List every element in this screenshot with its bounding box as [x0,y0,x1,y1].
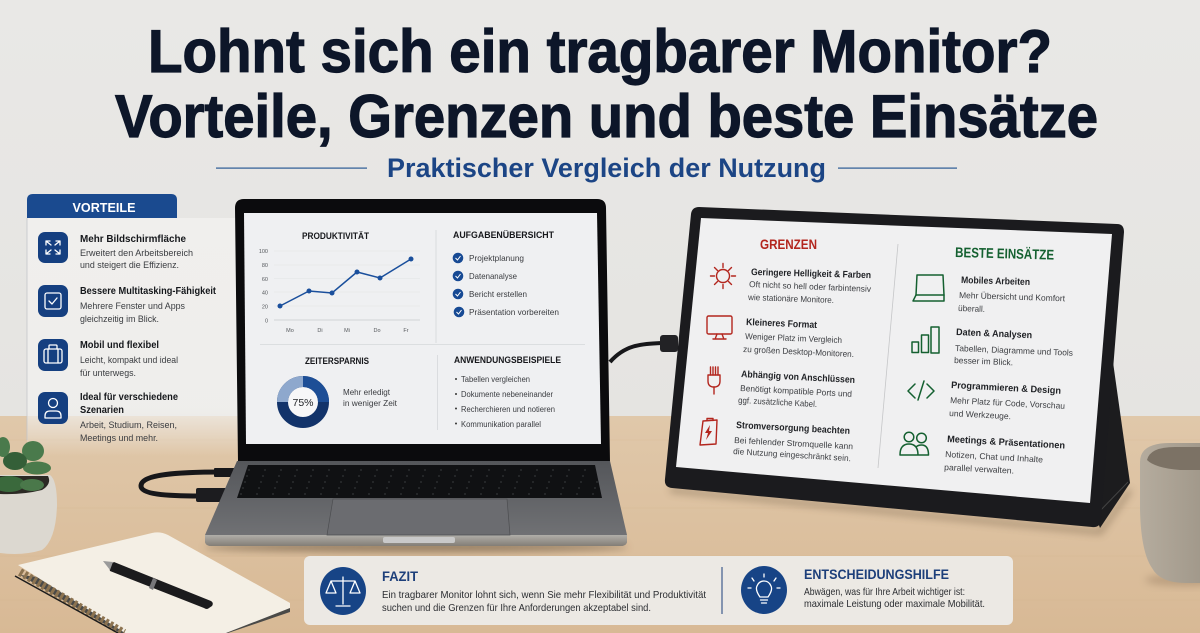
donut chart 75% [282,381,324,422]
limit: ports [708,367,855,409]
limit: brightness: Geringere Helligkeit & Farben [751,267,871,281]
portable monitor [665,207,1130,532]
Fazit text: FAZIT [382,568,418,584]
monitor frame [665,207,1124,527]
use-case list [455,375,555,429]
benefit: Szenarien: Arbeit, Studium, Reisen, [80,420,177,431]
use: data analysis: Tabellen, Diagramme und Tools [955,343,1073,358]
limit: size [707,316,854,359]
use: meetings: Meetings & Präsentationen [947,434,1065,452]
limit: power: die Nutzung eingeschränkt sein. [733,446,851,463]
title: Lohnt sich ein tragbarer Monitor? [148,18,1052,85]
task checklist: Projektplanung [469,253,524,263]
use: programming: Mehr Platz für Code, Vorschau [950,395,1066,411]
donut caption: in weniger Zeit [343,398,398,408]
title: Vorteile, Grenzen und beste Einsätze [115,83,1098,150]
benefit: Szenarien: Ideal für verschiedene [80,391,178,403]
heading: Beste Einsätze: BESTE EINSÄTZE [955,244,1054,263]
limit: power: Stromversorgung beachten [736,420,850,437]
heading: Grenzen: GRENZEN [760,236,817,252]
benefit: Multitasking [38,285,216,325]
column: Beste Einsätze [900,244,1073,476]
notebook with pen [15,532,290,633]
benefit: Mehr Bildschirmfläche: Erweitert den Arbeitsbereich [80,248,193,259]
donut caption: Mehr erledigt [343,387,391,397]
task checklist: Datenanalyse [469,271,517,281]
limit: size: zu großen Desktop-Monitoren. [743,344,854,359]
line chart: 80 [262,263,268,269]
background: wooden desk [0,416,1200,633]
monitor cable [610,335,678,362]
benefit: Mobil und flexibel: Mobil und flexibel [80,339,159,351]
use: programming: Programmieren & Design [951,380,1061,397]
use: meetings: Notizen, Chat und Inhalte [945,449,1044,464]
limit: power: Bei fehlender Stromquelle kann [734,435,854,451]
use: programming: und Werkzeuge. [949,408,1011,421]
Entscheidungshilfe text [804,566,985,610]
heading: Zeitersparnis: ZEITERSPARNIS [305,356,369,367]
laptop cable [141,468,238,502]
title [115,18,1098,150]
panel header: VORTEILE [72,200,136,215]
panel: Fazit and Entscheidungshilfe [304,556,1013,625]
use: mobile work: Mehr Übersicht und Komfort [959,290,1066,303]
donut caption [343,387,398,408]
benefit: Mobil und flexibel: für unterwegs. [80,368,136,379]
use: meetings [900,432,1065,476]
limit: ports: Abhängig von Anschlüssen [741,369,855,386]
task checklist: Bericht erstellen [469,289,527,299]
laptop screen dashboard [244,213,601,444]
monitor screen [676,218,1112,503]
benefit: Szenarien [38,391,178,444]
pen [103,561,213,609]
line chart: 40 [262,290,268,296]
use: data analysis: Daten & Analysen [956,327,1032,341]
benefit: Multitasking: Bessere Multitasking-Fähigkeit [80,285,216,297]
laptop shadow [204,542,628,552]
line chart: Mi [344,328,350,334]
limit: brightness: Oft nicht so hell oder farbintensiv [749,279,872,294]
laptop lid [235,199,610,462]
benefit: Mehr Bildschirmfläche: Mehr Bildschirmfläche [80,233,186,245]
line chart: Fr [403,328,409,334]
monitor stand [1090,355,1130,528]
limit: brightness: wie stationäre Monitore. [747,292,834,305]
Entscheidungshilfe text: Abwägen, was für Ihre Arbeit wichtiger ist: [804,586,965,598]
Entscheidungshilfe text: maximale Leistung oder maximale Mobilität. [804,598,985,610]
use-case list: Kommunikation parallel [461,420,541,429]
limit: size: Kleineres Format [746,317,818,331]
panel header [27,194,177,218]
limit: size: Weniger Platz im Vergleich [745,331,843,345]
monitor shadow [670,490,1130,532]
use-case list: Recherchieren und notieren [461,405,555,414]
column: Grenzen [700,236,872,463]
task checklist: Präsentation vorbereiten [469,307,559,317]
line chart: 20 [262,304,268,310]
benefit: Mobil und flexibel [38,339,178,379]
laptop [204,199,628,552]
use: meetings: parallel verwalten. [944,462,1014,476]
limit: power [700,418,854,463]
limit: brightness [710,264,872,305]
laptop base with keyboard [205,461,627,546]
heading: Aufgabenübersicht: AUFGABENÜBERSICHT [453,230,554,241]
benefit: Szenarien: Szenarien [80,404,124,416]
benefit: Mehr Bildschirmfläche: und steigert die Effizienz. [80,260,179,271]
line chart: Mo [286,328,294,334]
notebook spiral [20,572,124,633]
line chart: 60 [262,277,268,283]
task checklist [453,253,559,317]
use-case list: Dokumente nebeneinander [461,390,553,399]
use: mobile work [913,275,1066,314]
Entscheidungshilfe text: ENTSCHEIDUNGSHILFE [804,566,949,582]
line chart: Do [373,328,381,334]
heading: Anwendungsbeispiele: ANWENDUNGSBEISPIELE [454,355,561,366]
Fazit text [382,568,706,614]
benefit: Mehr Bildschirmfläche [38,232,193,271]
Entscheidungshilfe icon: light bulb [741,566,787,614]
line chart [259,249,420,334]
benefit: Multitasking: Mehrere Fenster und Apps [80,301,185,312]
Fazit icon: scales [320,567,366,615]
limit: ports: ggf. zusätzliche Kabel. [738,395,817,409]
line chart: 100 [259,249,268,255]
use-case list: Tabellen vergleichen [461,375,530,384]
line chart: Di [317,328,323,334]
panel: Vorteile [27,194,240,456]
line chart: 0 [265,318,268,324]
use: mobile work: Mobiles Arbeiten [961,275,1030,288]
use: data analysis [912,327,1073,367]
heading: Produktivität: PRODUKTIVITÄT [302,231,369,242]
Fazit text: Ein tragbarer Monitor lohnt sich, wenn Sie mehr Flexibilität und Produktivität [382,589,706,601]
Fazit text: suchen und die Grenzen für Ihre Anforderungen akzeptabel sind. [382,602,651,614]
use: mobile work: überall. [958,303,985,314]
background: wall [0,0,1200,418]
donut chart 75%: 75% [292,397,314,409]
benefit: Szenarien: Meetings und mehr. [80,433,158,444]
limit: ports: Benötigt kompatible Ports und [740,383,853,399]
subtitle with rules: Praktischer Vergleich der Nutzung [387,153,826,183]
plant in pot [0,437,57,554]
benefit: Multitasking: gleichzeitig im Blick. [80,314,159,325]
benefit: Mobil und flexibel: Leicht, kompakt und ideal [80,355,178,366]
use: programming [908,380,1066,421]
coffee mug [1140,443,1200,586]
use: data analysis: besser im Blick. [954,355,1013,367]
